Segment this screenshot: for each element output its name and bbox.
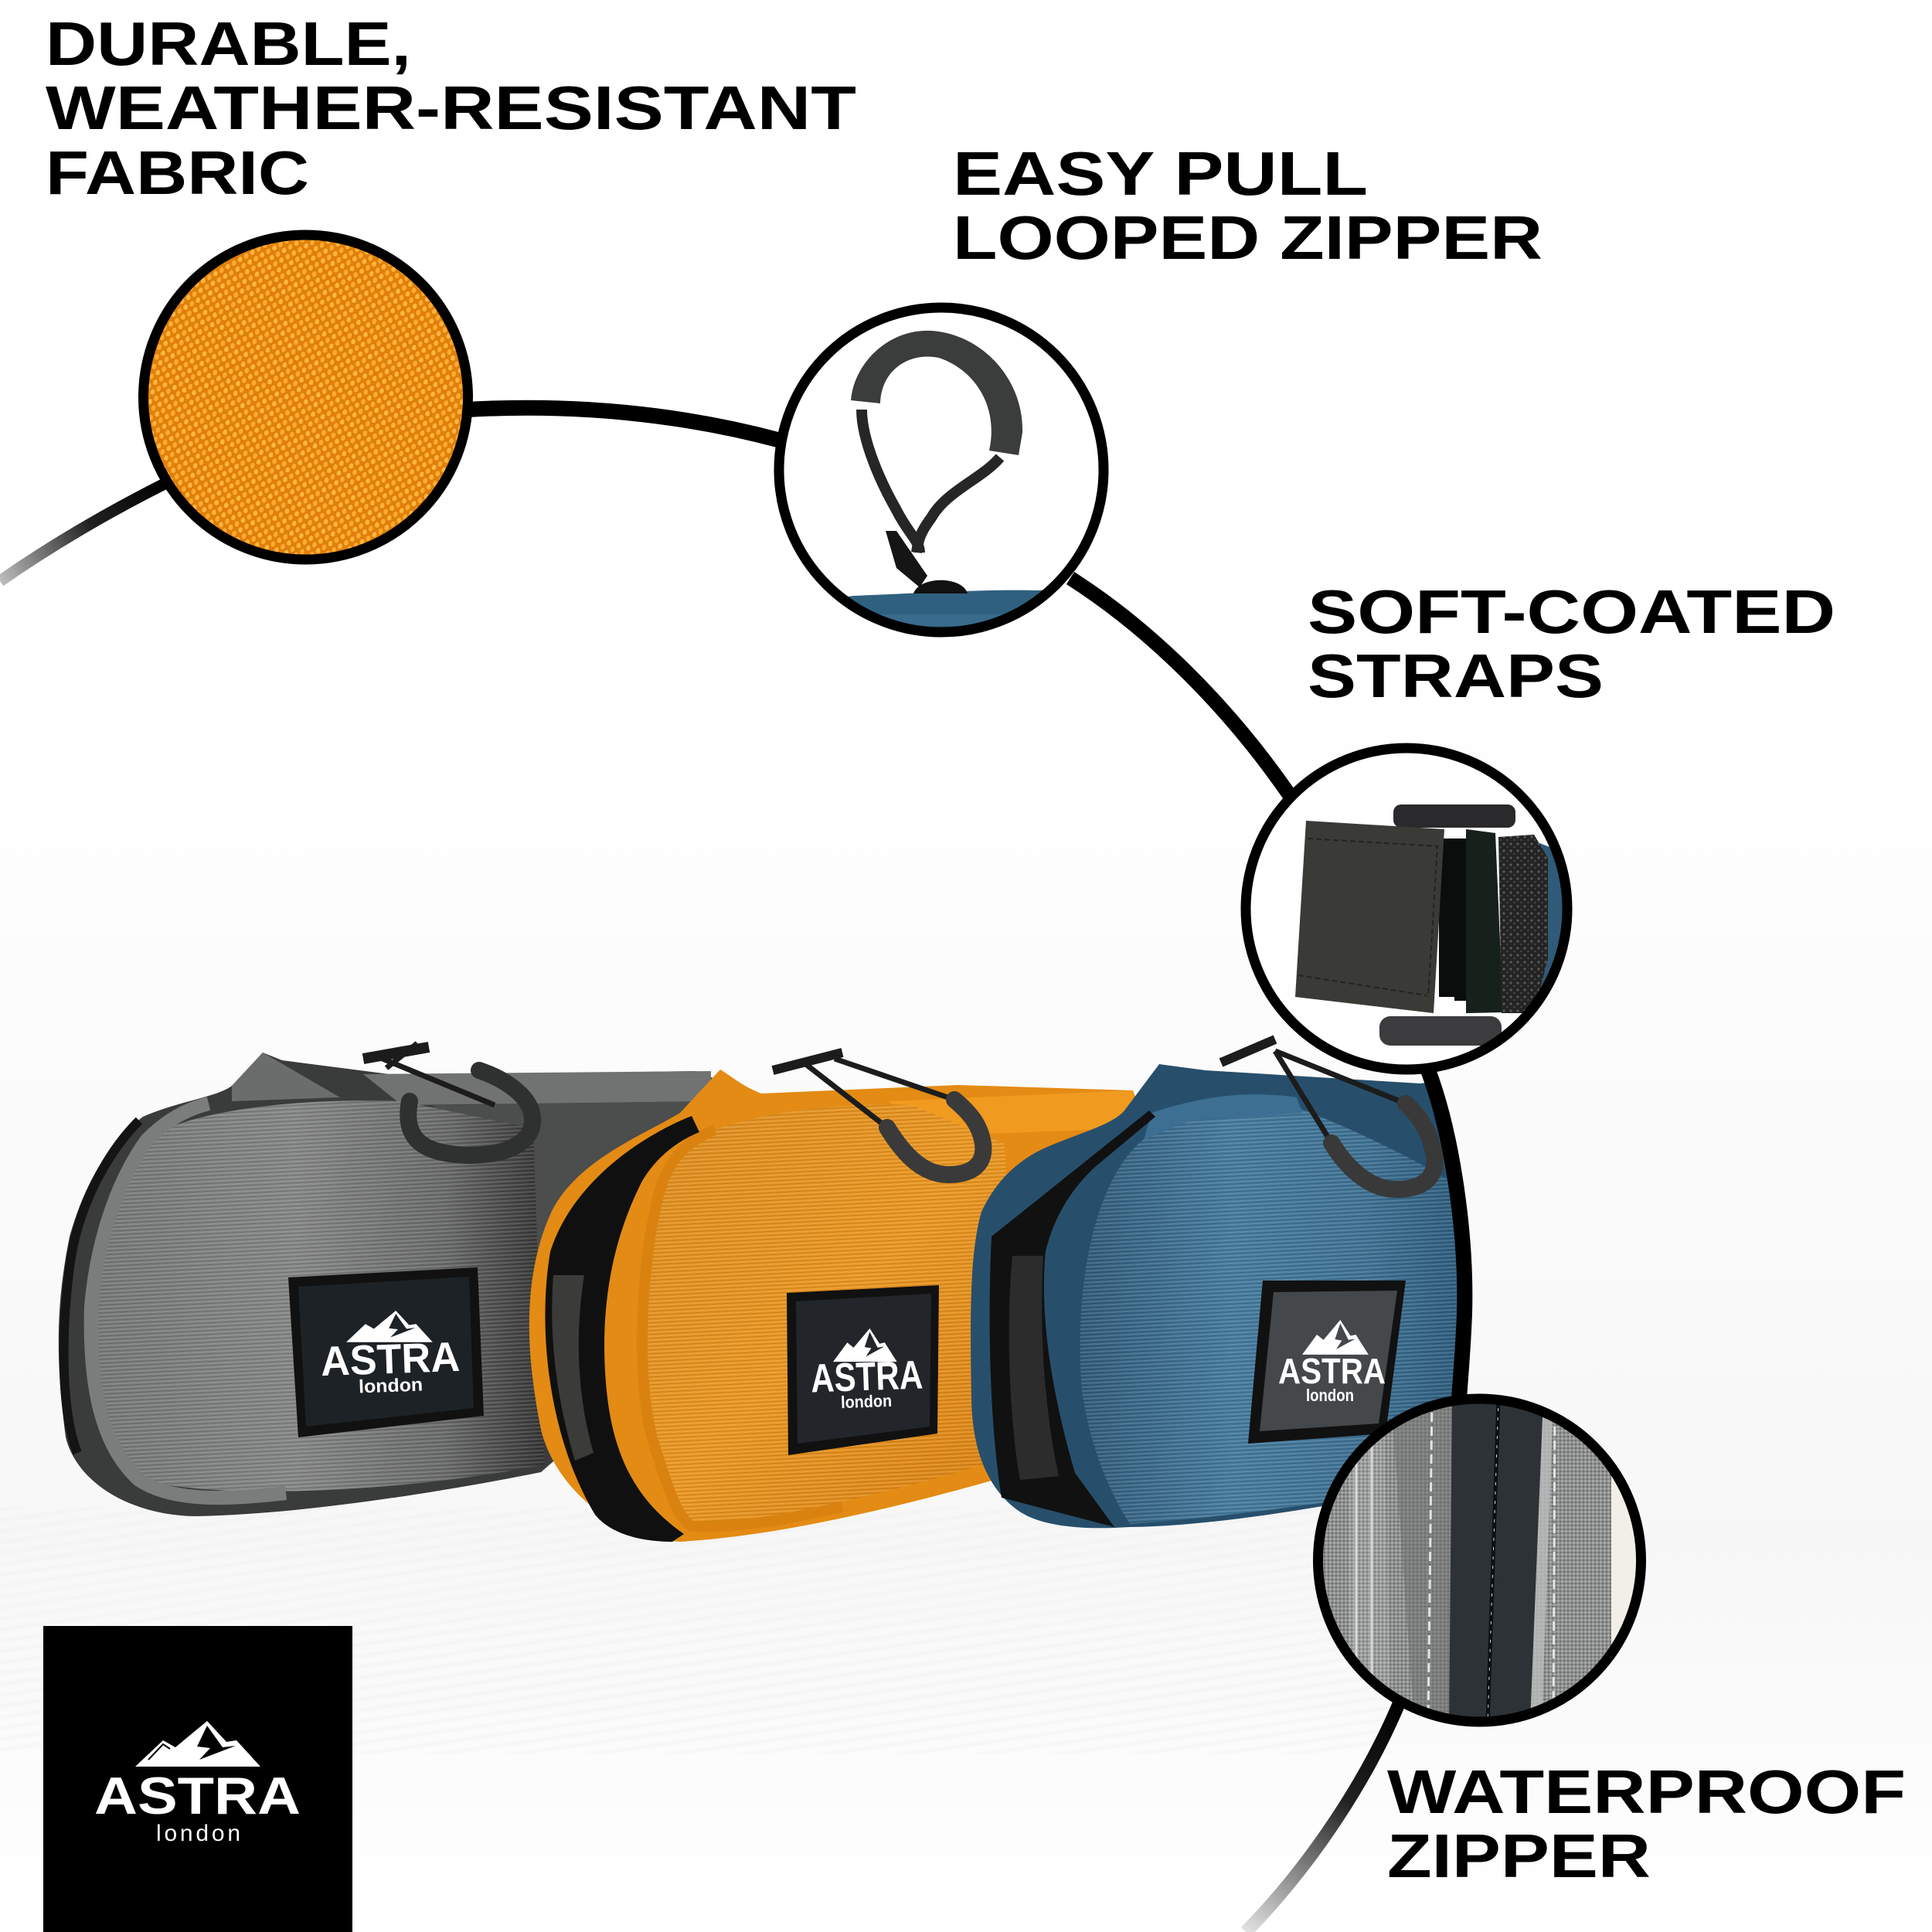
icon: mountain — [135, 1721, 260, 1767]
heading: waterproof zipper: WATERPROOF — [1387, 1757, 1906, 1826]
heading: soft-coated straps: STRAPS — [1308, 641, 1604, 710]
heading: durable fabric: FABRIC — [46, 138, 309, 207]
brand logo panel — [43, 1626, 352, 1932]
heading: waterproof zipper — [1387, 1757, 1906, 1890]
product: badge on orange pouch: london — [841, 1391, 892, 1412]
brand logo panel: ASTRA — [94, 1767, 301, 1825]
product: grey pouch — [59, 1053, 723, 1516]
connector: straps circle to waterproof zipper circle — [1428, 1070, 1464, 1399]
heading: soft-coated straps: SOFT-COATED — [1308, 577, 1835, 646]
callout circle: looped zipper pull — [779, 308, 1104, 657]
heading: durable fabric: DURABLE, — [46, 9, 411, 78]
heading: durable fabric — [46, 9, 856, 207]
heading: easy pull zipper: EASY PULL — [953, 139, 1368, 208]
product: zipper pulls — [363, 1039, 1435, 1189]
connector: fabric circle to zipper circle — [468, 408, 781, 440]
connector: zipper circle to straps circle — [1070, 578, 1289, 794]
product: badge on orange pouch — [787, 1285, 939, 1455]
product: badge on grey pouch: london — [359, 1375, 423, 1397]
callout circle: orange fabric close-up — [144, 235, 468, 560]
product: badge on blue pouch: london — [1306, 1386, 1354, 1405]
product: badge on grey pouch — [288, 1267, 484, 1437]
heading: durable fabric: WEATHER-RESISTANT — [46, 73, 856, 142]
brand logo panel: london — [156, 1821, 240, 1846]
callout circle: soft-coated strap and buckle — [1246, 748, 1577, 1070]
connector: left edge to fabric circle — [0, 483, 166, 581]
product: badge on blue pouch: ASTRA — [1278, 1351, 1386, 1391]
heading: easy pull zipper — [953, 139, 1543, 272]
callout circle: waterproof zipper — [1318, 1399, 1658, 1723]
heading: soft-coated straps — [1308, 577, 1835, 710]
product: orange pouch — [529, 1070, 1144, 1542]
product: badge on orange pouch: ASTRA — [810, 1352, 923, 1401]
product: blue pouch — [971, 1064, 1459, 1528]
heading: easy pull zipper: LOOPED ZIPPER — [953, 203, 1543, 272]
heading: waterproof zipper: ZIPPER — [1387, 1821, 1651, 1890]
product: badge on blue pouch — [1248, 1281, 1406, 1444]
connector: waterproof zipper circle to bottom edge — [1246, 1704, 1399, 1932]
product: badge on grey pouch: ASTRA — [320, 1334, 461, 1385]
